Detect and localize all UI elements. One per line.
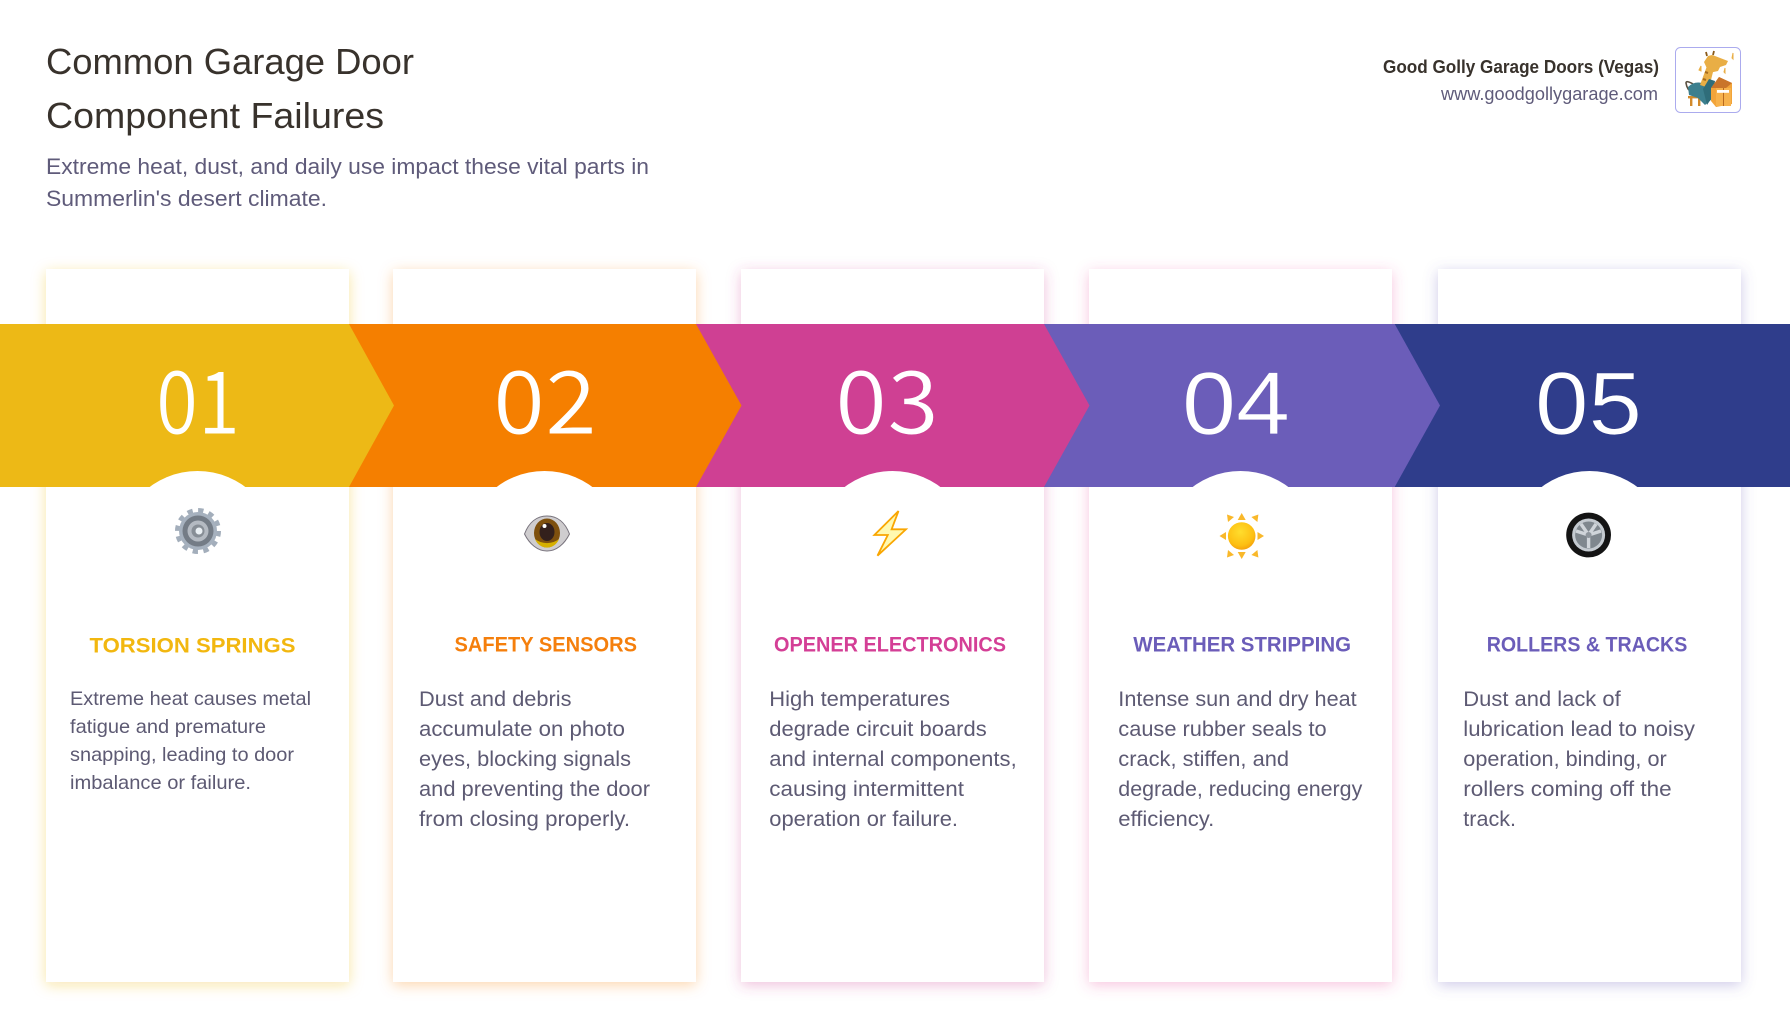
card backgrounds — [46, 269, 1741, 982]
body text: track. — [1463, 808, 1516, 831]
body text: from closing properly. — [419, 808, 630, 831]
body text: causing intermittent — [769, 778, 964, 801]
body text: and internal components, — [769, 748, 1017, 771]
card 3 background — [741, 269, 1044, 982]
number 05: 05 — [1535, 353, 1642, 453]
body text: accumulate on photo — [419, 718, 625, 741]
heading: SAFETY SENSORS — [454, 633, 637, 657]
subtitle — [46, 154, 649, 211]
body text: High temperatures — [769, 688, 950, 711]
body text: cause rubber seals to — [1118, 718, 1327, 741]
body text: and preventing the door — [419, 778, 650, 801]
panel: opener electronics — [741, 269, 1044, 982]
panel: rollers and tracks — [1438, 269, 1741, 982]
title: Common Garage Door — [46, 41, 414, 82]
body text: fatigue and premature — [70, 716, 266, 738]
body text: operation, binding, or — [1463, 748, 1667, 771]
chevron ribbon — [0, 324, 1790, 487]
body text: lubrication lead to noisy — [1463, 718, 1696, 741]
icon: wheel — [1566, 513, 1611, 557]
number 01: 01 — [156, 333, 240, 460]
heading: OPENER ELECTRONICS — [774, 633, 1006, 657]
number 03: 03 — [835, 333, 939, 460]
header: title and subtitle — [46, 41, 649, 211]
brand website: www.goodgollygarage.com — [1440, 84, 1658, 104]
icon: lightning bolt — [874, 511, 906, 556]
body text: Dust and debris — [419, 688, 572, 711]
body text: operation or failure. — [769, 808, 958, 831]
body text: Extreme heat causes metal — [70, 688, 311, 710]
body text: crack, stiffen, and — [1118, 748, 1289, 771]
body text: eyes, blocking signals — [419, 748, 631, 771]
subtitle: Summerlin's desert climate. — [46, 186, 327, 211]
icon: eye — [524, 516, 570, 551]
icon: giraffe logo — [1676, 48, 1740, 112]
heading: ROLLERS & TRACKS — [1487, 633, 1687, 657]
body text: snapping, leading to door — [70, 744, 295, 766]
number 04: 04 — [1182, 353, 1290, 453]
heading: WEATHER STRIPPING — [1133, 633, 1351, 657]
body text: degrade circuit boards — [769, 718, 987, 741]
body text — [70, 688, 311, 794]
icon: sun — [1220, 513, 1264, 559]
chevron 05 — [1300, 324, 1790, 487]
body text — [1463, 688, 1696, 831]
body text: degrade, reducing energy — [1118, 778, 1363, 801]
body text: Intense sun and dry heat — [1118, 688, 1357, 711]
panel: torsion springs — [46, 269, 349, 982]
number 02: 02 — [493, 333, 597, 460]
chevron 02 — [300, 324, 742, 487]
brand name: Good Golly Garage Doors (Vegas) — [1383, 57, 1659, 77]
card 1 background — [46, 269, 349, 982]
body text — [1118, 688, 1363, 831]
card 2 background — [393, 269, 696, 982]
subtitle: Extreme heat, dust, and daily use impact these vital parts in — [46, 154, 649, 179]
body text — [769, 688, 1017, 831]
card 5 background — [1438, 269, 1741, 982]
body text: rollers coming off the — [1463, 778, 1672, 801]
chevron 04 — [1000, 324, 1440, 487]
title: Component Failures — [46, 95, 384, 136]
body text: efficiency. — [1118, 808, 1214, 831]
chevron 01 — [0, 324, 394, 487]
body text: imbalance or failure. — [70, 772, 251, 794]
title — [46, 41, 414, 136]
body text: Dust and lack of — [1463, 688, 1621, 711]
panel: safety sensors — [393, 269, 696, 982]
heading: TORSION SPRINGS — [90, 634, 296, 658]
chevron 03 — [650, 324, 1090, 487]
brand block — [1383, 48, 1740, 112]
panel: weather stripping — [1089, 269, 1392, 982]
body text — [419, 688, 650, 831]
card 4 background — [1089, 269, 1392, 982]
icon: gear — [178, 510, 218, 552]
